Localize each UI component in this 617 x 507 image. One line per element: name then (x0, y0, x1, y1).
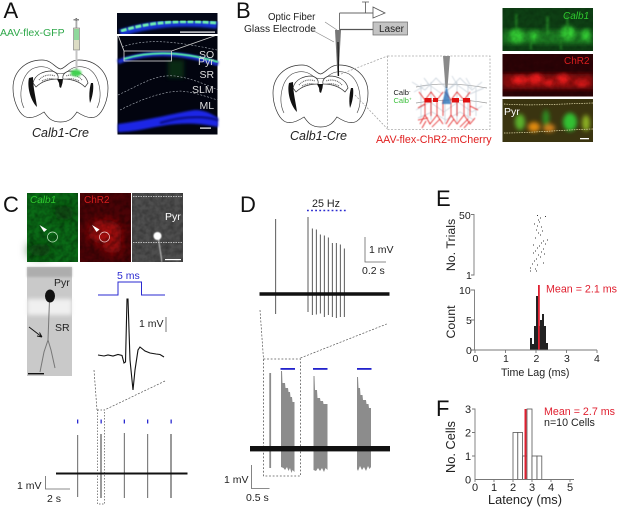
zoom guide lines (118, 35, 217, 51)
n label: n=10 Cells (544, 417, 595, 429)
micrograph: ChR2: ChR2 (84, 195, 110, 206)
layer labels: SLM (192, 84, 214, 96)
axes (443, 404, 574, 507)
micrograph: Calb1 green: Calb1 (563, 11, 589, 22)
labels Calb- and Calb+: + (409, 96, 412, 102)
stimulus dots (307, 210, 346, 212)
icon: syringe (74, 18, 80, 70)
histogram axes: 1 (503, 353, 509, 365)
micrograph: Calb1 (27, 193, 78, 262)
axes: 0 (472, 482, 478, 494)
labels Calb- and Calb+: Calb (394, 96, 409, 105)
histogram axes: 3 (564, 353, 570, 365)
histogram bars (513, 409, 542, 480)
histogram axes: Count (444, 305, 458, 339)
scale bar: 0.2 s (362, 265, 385, 277)
labels Calb- and Calb+: - (409, 88, 411, 94)
axes: 1 (491, 482, 497, 494)
histogram axes: 2 (534, 353, 540, 365)
labels Calb- and Calb+: Calb (394, 88, 409, 97)
diagram: coronal brain section A (13, 60, 108, 122)
axes: 3 (529, 482, 535, 494)
micrograph: merged with Pyr layer (502, 99, 593, 142)
histogram axes: 4 (594, 353, 600, 365)
zoom dashes (94, 370, 165, 410)
label Glass Electrode: Glass Electrode (244, 24, 316, 35)
axes: 5 (567, 482, 573, 494)
micrograph: ChR2 red: ChR2 (564, 56, 590, 67)
electrode and fiber (312, 13, 373, 76)
histogram axes: 0 (466, 345, 472, 357)
histogram axes: Time Lag (ms) (501, 367, 570, 379)
baseline trace (250, 446, 390, 451)
micrograph: merged with Pyr layer: Pyr (504, 106, 520, 118)
blue stimulus bars (280, 368, 372, 370)
micrograph: hippocampal section with layers (118, 36, 218, 134)
zoom dashes (341, 56, 388, 129)
heading C: C (3, 192, 19, 217)
label AAV-flex-ChR2-mCherry: AAV-flex-ChR2-mCherry (376, 134, 492, 146)
heading E: E (436, 186, 451, 211)
label 25 Hz: 25 Hz (312, 198, 340, 210)
raster axis: 1 (466, 270, 472, 282)
micrograph: ChR2 red (502, 54, 593, 96)
heading F: F (436, 396, 449, 421)
burst traces (269, 371, 371, 473)
label Optic Fiber: Optic Fiber (268, 12, 316, 23)
label AAV-flex-GFP: AAV-flex-GFP (0, 27, 65, 39)
axes: No. Cells (443, 421, 458, 473)
scale bar: 1 mV (17, 480, 42, 492)
panel F: latency histogram (436, 396, 615, 507)
scale 1 mV: 1 mV (139, 318, 164, 330)
label Calb1-Cre: Calb1-Cre (32, 126, 89, 140)
injection site (70, 70, 82, 76)
micrograph: neuron morphology: SR (55, 322, 70, 334)
panel E: raster and time lag histogram (436, 186, 617, 379)
axes: 1 (465, 451, 471, 463)
histogram axes: 10 (459, 285, 471, 297)
histogram axes (444, 285, 600, 379)
mean line (538, 285, 540, 350)
mean label: Mean = 2.1 ms (546, 284, 617, 296)
raster axis: No. Trials (444, 219, 458, 271)
axes: 2 (510, 482, 516, 494)
micrograph: neuron morphology (27, 267, 72, 376)
diagram: coronal brain section B (273, 65, 368, 127)
raster axis (444, 210, 474, 282)
micrograph: Calb1 green (502, 8, 593, 51)
scale bar (362, 237, 394, 277)
layer labels: ML (200, 100, 214, 112)
heading D: D (240, 192, 256, 217)
light pulse (98, 282, 165, 295)
histogram bars (530, 296, 548, 350)
high frequency trace (260, 217, 390, 318)
scale bar: 1 mV (224, 474, 249, 486)
scale bar (17, 476, 70, 505)
label 5 ms: 5 ms (117, 270, 140, 282)
micrograph: filled cell (132, 193, 183, 262)
stimulus ticks (77, 420, 172, 424)
panel C: single-cell responses (3, 192, 188, 505)
inset: network schematic (388, 56, 490, 130)
axes: 0 (465, 474, 471, 486)
axes: 4 (548, 482, 554, 494)
axes: Latency (ms) (488, 492, 562, 507)
layer labels: Pyr (198, 56, 214, 68)
micrograph: ChR2 (80, 193, 131, 262)
micrograph: filled cell: Pyr (165, 211, 181, 223)
label Calb1-Cre: Calb1-Cre (290, 129, 347, 143)
mean line (524, 409, 526, 480)
laser box: Laser (379, 24, 405, 35)
layer labels: SO (199, 49, 214, 61)
axes: 2 (465, 428, 471, 440)
panel B: optogenetic recording setup (236, 0, 593, 146)
mean label: Mean = 2.7 ms (544, 406, 615, 418)
histogram axes: 5 (466, 315, 472, 327)
scale bar: 0.5 s (246, 492, 269, 504)
panel D: 25 Hz stimulation (224, 192, 394, 504)
panel A: viral injection and GFP expression (0, 0, 218, 140)
icon: amplifier (362, 2, 385, 18)
micrograph: Calb1: Calb1 (30, 195, 56, 206)
laser box (373, 22, 408, 35)
micrograph: neuron morphology: Pyr (54, 277, 70, 289)
average spike waveform (98, 299, 164, 390)
spike train trace (56, 433, 188, 498)
axes: 3 (465, 404, 471, 416)
labels Calb- and Calb+ (394, 88, 412, 105)
scale bar: 2 s (47, 493, 61, 505)
scale bar (224, 465, 270, 504)
layer labels (192, 49, 215, 112)
raster dots (530, 216, 548, 271)
zoom dashes (260, 310, 387, 359)
layer labels: SR (200, 69, 215, 81)
micrograph: zoomed inset (117, 13, 218, 34)
histogram axes: 0 (472, 353, 478, 365)
scale bar: 1 mV (369, 244, 394, 256)
raster axis: 50 (459, 210, 471, 222)
